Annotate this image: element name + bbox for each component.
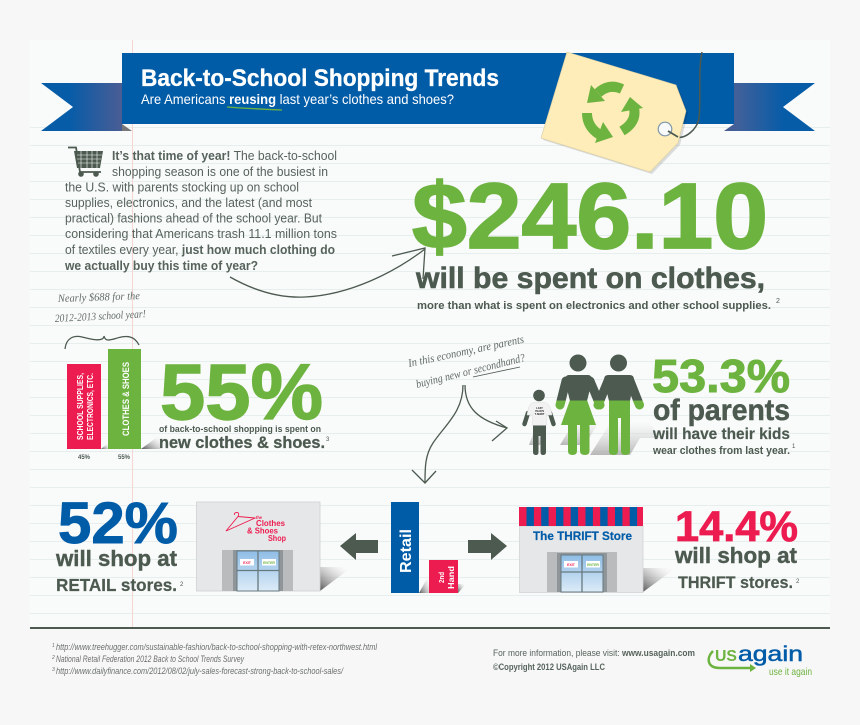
- stat: 53.3% of parents: will have their kids: [652, 426, 790, 443]
- bar shadows: [101, 443, 108, 449]
- store shadow: [320, 567, 352, 591]
- tag hole: [658, 122, 672, 136]
- footnotes: 3: [52, 667, 55, 673]
- stat: 52% retail: will shop at: [55, 546, 177, 571]
- intro text block: practical) fashions ahead of the school year. But: [65, 210, 322, 226]
- intro text block: supplies, electronics, and the latest (and most: [65, 195, 312, 210]
- father lower green: [598, 382, 640, 455]
- tag body: [541, 52, 686, 172]
- stat: 14.4% thrift: THRIFT stores.: [678, 574, 793, 592]
- doors: ENTER: [263, 561, 275, 565]
- arrow: right to thrift store: [468, 533, 507, 560]
- footnotes: http://www.dailyfinance.com/2012/08/02/july-sales-forecast-strong-back-to-school-sales/: [56, 666, 344, 677]
- illustration: retail store: [196, 502, 352, 591]
- stat: $246.10 spent on clothes: [412, 164, 780, 312]
- doors: [222, 550, 293, 591]
- handwritten note: $688: 2012-2013 school year!: [55, 308, 146, 325]
- illustration: thrift store: [519, 507, 676, 592]
- doors: EXIT: [567, 563, 576, 567]
- logo: USAgain: [709, 643, 812, 678]
- child: T-SHIRT: [535, 413, 545, 416]
- father: [598, 354, 640, 455]
- doors: EXIT: [243, 561, 252, 565]
- icon: curly brace: [65, 336, 139, 349]
- footer contact text: [493, 648, 695, 672]
- arrow: forked arrows to retail and parents: [412, 385, 507, 483]
- footnotes: National Retail Federation 2012 Back to School Trends Survey: [56, 654, 245, 665]
- store sign: The THRIFT Store: [533, 529, 632, 543]
- store sign: & Shoes: [247, 526, 278, 536]
- stat: 14.4% thrift: 2: [796, 579, 800, 585]
- title: Back-to-School Shopping Trends: [141, 65, 499, 92]
- bar chart: spending split: [67, 349, 160, 461]
- tag shadow: [543, 54, 688, 174]
- doors: ENTER: [587, 563, 599, 567]
- stat: 55%: 55%: [160, 347, 323, 436]
- stat: 53.3% of parents: 1: [792, 444, 796, 450]
- figure shadows: [529, 425, 546, 445]
- bar: retail vs secondhand: Hand: [446, 566, 456, 589]
- arrow: intro to spending figure: [230, 248, 425, 297]
- intro text block: we actually buy this time of year?: [64, 258, 258, 273]
- secondhand bar: [429, 560, 458, 593]
- big number: $246.10: [412, 164, 768, 268]
- stat: 53.3% of parents: [652, 350, 796, 457]
- handwritten question: [406, 334, 527, 391]
- stat: 14.4% thrift: [674, 503, 800, 592]
- storefront: [196, 502, 320, 591]
- child: [524, 390, 554, 455]
- bar: clothes and shoes 55%: [108, 349, 141, 449]
- storefront: [520, 526, 643, 592]
- stat: 52% retail: 2: [180, 582, 184, 588]
- subtitle: Are Americans reusing last year’s clothes and shoes?: [141, 91, 454, 107]
- handwritten note: $688: Nearly $688 for the: [57, 290, 140, 305]
- store shadow: [643, 568, 676, 592]
- stat: 52% retail: [55, 491, 184, 595]
- intro text block: considering that Americans trash 11.1 million tons: [65, 226, 337, 241]
- child: YEAR'S: [535, 410, 544, 413]
- footer contact text: For more information, please visit: www.usagain.com: [493, 648, 695, 659]
- bar chart: spending split: 55%: [118, 455, 131, 461]
- stat: 55%: new clothes & shoes.: [159, 434, 325, 452]
- icon: family figures: [524, 354, 660, 455]
- child: LAST: [536, 407, 543, 410]
- icon: hanger: [226, 512, 255, 531]
- arrow: left to retail store: [340, 533, 378, 560]
- headline: will be spent on clothes,: [415, 262, 765, 295]
- bar chart: spending split: SCHOOL SUPPLIES,: [75, 373, 85, 440]
- handwritten question: buying new or secondhand?: [415, 352, 527, 391]
- striped awning: [519, 507, 643, 526]
- handwritten note: $688: [55, 290, 146, 325]
- tag string: [677, 52, 702, 137]
- mother upper dark: [560, 375, 600, 405]
- subtitle underline: [227, 107, 282, 110]
- stat: 55%: of back-to-school shopping is spent on: [159, 424, 321, 435]
- store sign: the: [256, 515, 262, 520]
- bar: retail vs secondhand: [391, 502, 466, 593]
- left ribbon tail: [41, 83, 122, 131]
- recycling arrows: [587, 85, 643, 143]
- doors: [547, 552, 617, 592]
- logo swoosh arrow: [709, 651, 752, 668]
- logo wordmark: US: [715, 648, 737, 665]
- left ribbon fold: [122, 124, 132, 131]
- footnotes: 2: [51, 655, 55, 661]
- footnotes: [51, 642, 378, 677]
- footer divider: [30, 627, 830, 629]
- footnotes: http://www.treehugger.com/sustainable-fashion/back-to-school-shopping-with-retex-northwest.html: [56, 642, 378, 653]
- store sign: [247, 515, 286, 543]
- footnotes: 1: [52, 643, 55, 649]
- retail bar: [391, 502, 419, 593]
- handwritten question: In this economy, are parents: [406, 334, 526, 370]
- mother lower green: [560, 382, 600, 455]
- intro text block: It’s that time of year! The back-to-school: [112, 148, 337, 163]
- right ribbon tail: [724, 83, 815, 131]
- logo tagline: use it again: [769, 666, 812, 678]
- stat: 52% retail: RETAIL stores.: [56, 575, 177, 595]
- stat: 52% retail: 52%: [58, 491, 178, 556]
- footer contact text: ©Copyright 2012 USAgain LLC: [493, 662, 605, 672]
- intro text block: shopping season is one of the busiest in: [112, 164, 328, 179]
- intro text block: of textiles every year, just how much clothing do: [65, 242, 335, 257]
- title banner: [41, 53, 815, 131]
- banner bar: [122, 53, 734, 124]
- stat: 53.3% of parents: wear clothes from last year.: [652, 445, 790, 457]
- store sign: Shop: [268, 533, 286, 543]
- footnote marker: 2: [776, 298, 780, 305]
- mother: [560, 354, 600, 455]
- stat: 14.4% thrift: will shop at: [674, 543, 798, 568]
- stat: 53.3% of parents: of parents: [653, 394, 790, 427]
- secondhand bar shadow: [458, 584, 466, 593]
- stat: 55%: 3: [326, 437, 330, 443]
- icon: price tag with recycling arrows: [541, 52, 702, 174]
- bar: retail vs secondhand: 2nd: [437, 572, 446, 583]
- icon: shopping cart: [68, 148, 103, 177]
- stat: 14.4% thrift: 14.4%: [675, 503, 798, 551]
- panel: notebook paper background: [30, 40, 830, 628]
- bar chart: spending split: ELECTRONICS, ETC.: [85, 373, 95, 440]
- stat: 53.3% of parents: 53.3%: [652, 350, 790, 402]
- store sign: Clothes: [256, 518, 285, 528]
- value labels: 45%: [78, 455, 91, 461]
- father upper dark: [598, 375, 640, 405]
- intro text block: [64, 148, 337, 273]
- supporting line: more than what is spent on electronics and other school supplies.: [417, 300, 771, 312]
- retail bar shadow: [419, 575, 429, 593]
- bar chart: spending split: CLOTHES & SHOES: [121, 362, 132, 436]
- intro text block: the U.S. with parents stocking up on school: [65, 180, 299, 194]
- bar: school supplies 45%: [67, 364, 101, 449]
- logo: USAgain: again: [738, 643, 803, 666]
- bar: retail vs secondhand: Retail: [398, 529, 415, 573]
